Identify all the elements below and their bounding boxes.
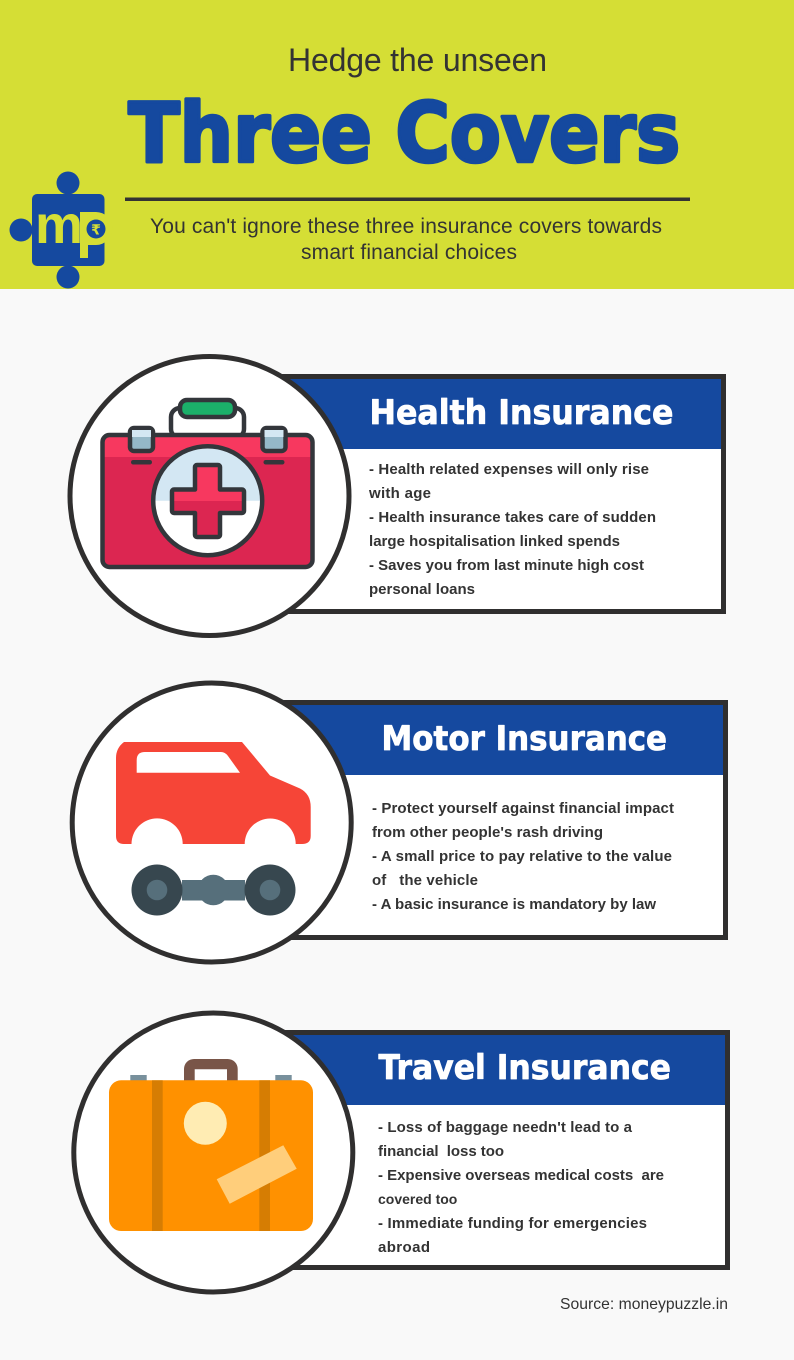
subtitle — [150, 215, 662, 264]
title — [128, 85, 680, 181]
title: Three — [128, 85, 372, 181]
circle badge: motor — [72, 683, 351, 962]
health insurance points: large hospitalisation linked spends — [369, 533, 620, 550]
icon: moneypuzzle logo: ₹ — [91, 222, 101, 238]
motor insurance points: - A basic insurance is mandatory by law — [372, 896, 656, 913]
health insurance points: - Saves you from last minute high cost — [369, 557, 644, 574]
icon: car — [116, 742, 311, 916]
motor insurance points: - A small price to pay relative to the value — [372, 848, 672, 865]
source note: Source: moneypuzzle.in — [560, 1296, 728, 1313]
panel: health insurance — [250, 376, 724, 612]
health insurance points: - Health related expenses will only rise — [369, 461, 649, 478]
heading: health insurance: Health Insurance — [370, 393, 673, 432]
travel insurance points: financial loss too — [378, 1143, 504, 1160]
kicker heading: Hedge the unseen — [288, 42, 547, 78]
travel insurance points: - Immediate funding for emergencies — [378, 1215, 647, 1232]
subtitle: You can't ignore these three insurance covers towards — [150, 215, 662, 238]
travel insurance points: - Loss of baggage needn't lead to a — [378, 1119, 633, 1136]
travel insurance points: - Expensive overseas medical costs are — [378, 1167, 664, 1184]
travel insurance points: abroad — [378, 1239, 430, 1256]
icon: moneypuzzle logo: m — [35, 195, 83, 255]
motor insurance points — [372, 800, 674, 913]
icon: moneypuzzle logo — [10, 172, 112, 288]
health insurance points: personal loans — [369, 581, 475, 598]
icon: first aid kit — [102, 400, 312, 567]
health insurance points: with age — [368, 485, 431, 502]
motor insurance points: - Protect yourself against financial impact — [372, 800, 674, 817]
motor insurance points: of the vehicle — [372, 872, 478, 889]
heading: travel insurance: Travel Insurance — [378, 1048, 671, 1087]
travel insurance points: covered too — [378, 1191, 457, 1207]
heading: motor insurance: Motor Insurance — [382, 719, 667, 758]
health insurance points — [368, 461, 656, 598]
panel: travel insurance — [250, 1032, 728, 1268]
health insurance points: - Health insurance takes care of sudden — [369, 509, 656, 526]
subtitle: smart financial choices — [301, 241, 517, 264]
icon: suitcase — [109, 1059, 313, 1231]
circle badge: health — [70, 356, 349, 636]
motor insurance points: from other people's rash driving — [372, 824, 603, 841]
title: Covers — [396, 86, 680, 181]
circle badge: travel — [74, 1013, 353, 1292]
travel insurance points — [378, 1119, 664, 1256]
header banner — [0, 0, 794, 289]
panel: motor insurance — [250, 702, 726, 938]
